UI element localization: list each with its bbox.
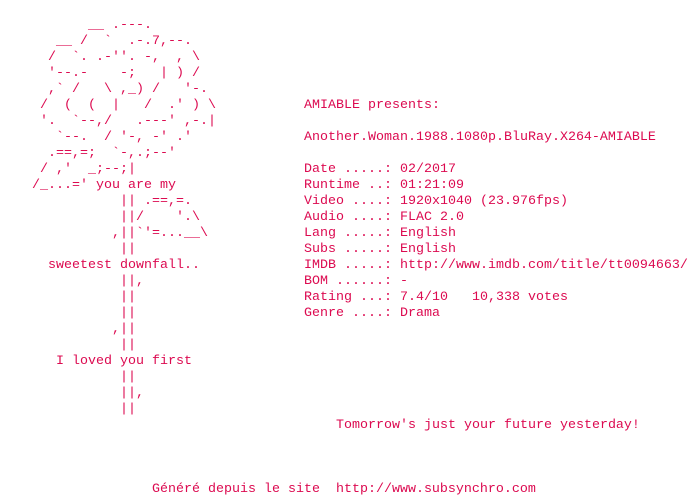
heading: release group: AMIABLE presents: [304, 98, 440, 113]
release title: Another.Woman.1988.1080p.BluRay.X264-AMIABLE [304, 130, 656, 145]
release details list: Date .....: 02/2017 Runtime ..: 01:21:09 Video ....: 1920x1040 (23.976fps) Audio ....: FLAC 2.0 Lang .....: English Subs .....: English IMDB .....: http://www.imdb.com/title/tt0094663/ BOM ......: - Rating ...: 7.4/10 10,338 votes Genre ....: Drama [304, 162, 688, 321]
ascii art: flowering tree with lyrics: __ .---. __ / ` .-.7,--. / `. .-''. -, , \ '--.- -; | ) / ,` / \ ,_) / '-. / ( ( | / .' ) \ '. `--,/ .---' ,-.| `--. / '-, -' .' .==,=; `-,.;--' / ,' _;--;| /_...=' you are my || .==,=. ||/ '.\ ,||`'=...__\ || sweetest downfall.. ||, || || ,|| || I loved you first || ||, || [0, 18, 216, 417]
footer credit: Généré depuis le site http://www.subsynchro.com [152, 482, 536, 497]
tagline: Tomorrow's just your future yesterday! [336, 418, 640, 433]
